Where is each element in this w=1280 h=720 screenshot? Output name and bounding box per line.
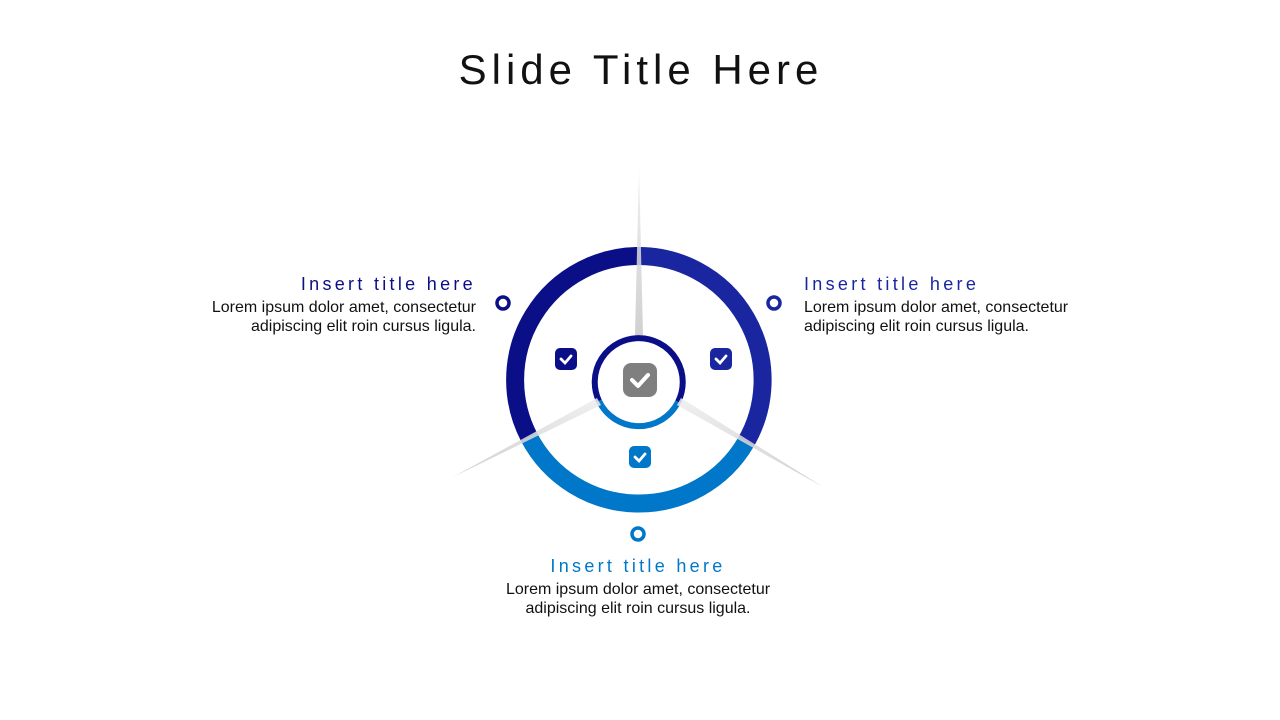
- text: left: [212, 274, 476, 335]
- inner ring: [595, 338, 683, 426]
- icon bottom: [629, 446, 651, 468]
- text: bottom: Lorem ipsum dolor amet, consectetur: [506, 581, 770, 598]
- text: right: adipiscing elit roin cursus ligula.: [804, 318, 1029, 335]
- markers: [497, 297, 780, 540]
- text: bottom: Insert title here: [550, 556, 726, 576]
- text: left: Insert title here: [301, 274, 476, 294]
- outer ring segments: [515, 256, 763, 504]
- text: bottom: adipiscing elit roin cursus ligula.: [526, 600, 750, 617]
- center icon: [623, 363, 657, 397]
- text: left: Lorem ipsum dolor amet, consectetur: [212, 299, 476, 316]
- text: right: Insert title here: [804, 274, 979, 294]
- title: Slide Title Here: [459, 46, 823, 93]
- blades: [453, 167, 823, 487]
- text: bottom: [506, 556, 770, 617]
- icon right: [710, 348, 732, 370]
- icon left: [555, 348, 577, 370]
- text: right: [804, 274, 1068, 335]
- text: right: Lorem ipsum dolor amet, consectetur: [804, 299, 1068, 316]
- text: left: adipiscing elit roin cursus ligula.: [251, 318, 476, 335]
